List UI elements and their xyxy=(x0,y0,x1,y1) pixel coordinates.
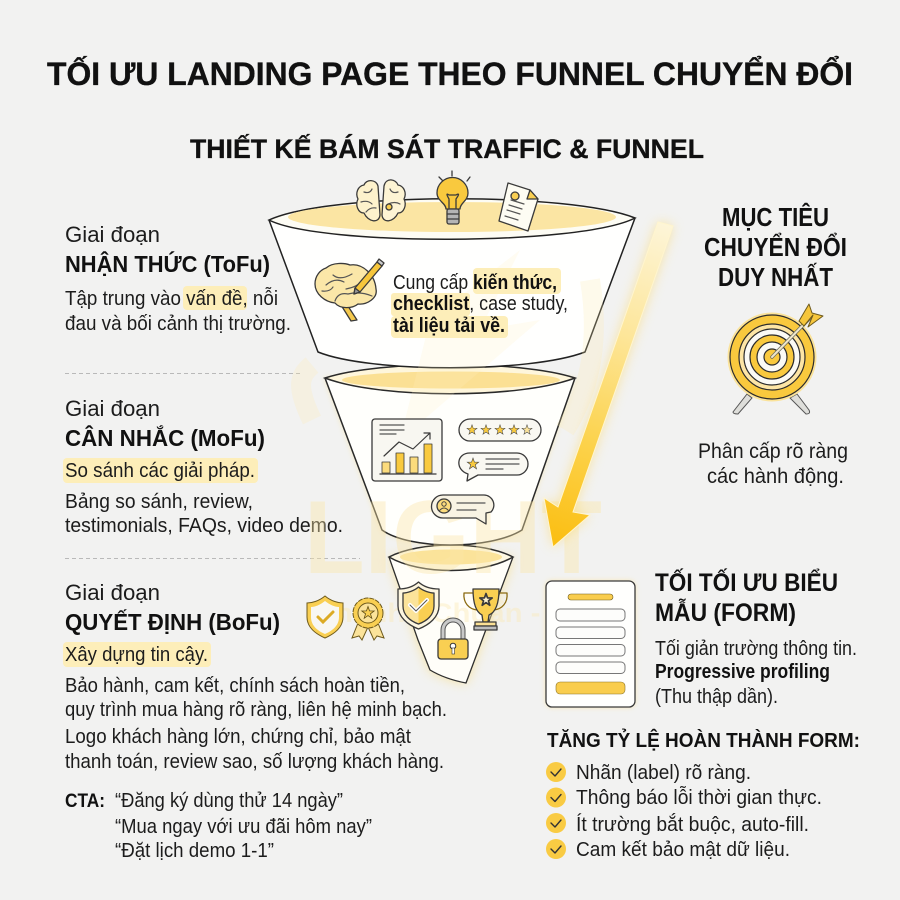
CTA label: CTA: xyxy=(65,790,105,812)
form description: Progressive profiling xyxy=(655,661,830,683)
stage 1 heading: NHẬN THỨC (ToFu) xyxy=(65,250,270,277)
goal heading: DUY NHẤT xyxy=(718,263,833,292)
stage 1 label: Giai đoạn xyxy=(65,222,160,247)
stage 3 key message: Xây dựng tin cậy. xyxy=(65,643,208,666)
panel: stage 2 MoFu text xyxy=(63,396,343,537)
panel: stage 3 BoFu text xyxy=(63,580,447,862)
CTA examples: “Đặt lịch demo 1-1” xyxy=(115,840,274,862)
funnel tier 3: BoFu xyxy=(389,545,513,683)
icon: brain with pencil xyxy=(315,259,384,321)
stage 1 description: Tập trung vào vấn đề, nỗi xyxy=(65,287,278,310)
checklist items: Ít trường bắt buộc, auto-fill. xyxy=(576,813,809,836)
chart card xyxy=(372,419,442,481)
icon: side shield xyxy=(307,596,343,638)
icon: document on funnel rim xyxy=(499,183,538,231)
testimonial speech bubble xyxy=(432,495,494,524)
panel: form optimisation xyxy=(546,567,857,708)
icon: padlock xyxy=(438,620,468,659)
stage 1 description: đau và bối cảnh thị trường. xyxy=(65,312,291,335)
rating pill with stars xyxy=(459,419,541,441)
check icons xyxy=(546,762,566,859)
stage 2 label: Giai đoạn xyxy=(65,396,160,421)
panel: conversion goal xyxy=(698,202,848,488)
stage 3 description: Logo khách hàng lớn, chứng chỉ, bảo mật xyxy=(65,725,411,748)
checklist heading: TĂNG TỶ LỆ HOÀN THÀNH FORM: xyxy=(547,728,860,752)
arrow: funnel flow xyxy=(544,222,673,547)
stage 2 heading: CÂN NHẮC (MoFu) xyxy=(65,424,265,451)
CTA examples: “Đăng ký dùng thử 14 ngày” xyxy=(115,790,343,812)
checklist items: Thông báo lỗi thời gian thực. xyxy=(576,786,822,809)
goal heading: MỤC TIÊU xyxy=(722,202,829,232)
goal caption: các hành động. xyxy=(707,465,844,488)
stage 3 description: thanh toán, review sao, số lượng khách hàng. xyxy=(65,750,444,773)
form heading: TỐI TỐI ƯU BIỂU xyxy=(655,567,838,597)
stage 1 highlight xyxy=(183,286,247,310)
stage 3 heading: QUYẾT ĐỊNH (BoFu) xyxy=(65,608,280,635)
icon: form card xyxy=(546,581,635,707)
form description: (Thu thập dần). xyxy=(655,686,778,708)
stage 2 description: Bảng so sánh, review, xyxy=(65,490,253,513)
goal heading: CHUYỂN ĐỔI xyxy=(704,232,847,262)
logo watermark: Nhanh - Chuẩn - Đẹp xyxy=(314,598,604,628)
highlights xyxy=(391,268,561,338)
icon: brain on funnel rim xyxy=(357,180,405,221)
icon: rosette badge xyxy=(352,598,384,640)
icon: light bulb on funnel rim xyxy=(437,171,470,224)
funnel copy: Cung cấp kiến thức, xyxy=(393,272,569,294)
panel: stage 1 ToFu text xyxy=(65,222,291,335)
form description: Tối giản trường thông tin. xyxy=(655,638,857,660)
checklist items: Cam kết bảo mật dữ liệu. xyxy=(576,838,790,861)
stage 2 key message: So sánh các giải pháp. xyxy=(65,459,255,482)
CTA examples: “Mua ngay với ưu đãi hôm nay” xyxy=(115,816,372,838)
form heading: MẪU (FORM) xyxy=(655,597,796,627)
stage 2 description: testimonials, FAQs, video demo. xyxy=(65,514,343,537)
logo watermark xyxy=(301,250,604,628)
stage 3 highlight xyxy=(63,642,211,667)
funnel copy: tài liệu tải về. xyxy=(393,315,505,337)
stage 3 description: Bảo hành, cam kết, chính sách hoàn tiền, xyxy=(65,674,405,697)
stage 3 label: Giai đoạn xyxy=(65,580,160,605)
stage 1 funnel text xyxy=(391,268,568,338)
stage 2 highlight xyxy=(63,458,258,483)
title: TỐI ƯU LANDING PAGE THEO FUNNEL CHUYỂN ĐỔI xyxy=(47,56,853,92)
funnel tier 2: MoFu xyxy=(325,364,575,545)
funnel tier 1: ToFu xyxy=(269,199,635,368)
icon: funnel shield xyxy=(398,582,439,629)
icon: target with arrow xyxy=(728,304,823,414)
panel: form completion checklist xyxy=(546,728,860,861)
checklist items: Nhãn (label) rõ ràng. xyxy=(576,761,751,784)
goal caption: Phân cấp rõ ràng xyxy=(698,440,848,463)
funnel copy: checklist, case study, xyxy=(393,293,580,315)
subtitle: THIẾT KẾ BÁM SÁT TRAFFIC & FUNNEL xyxy=(190,133,704,164)
review speech bubble xyxy=(459,453,528,481)
icon: trophy xyxy=(464,589,507,630)
logo watermark: LIGHT xyxy=(304,480,602,596)
stage 3 description: quy trình mua hàng rõ ràng, liên hệ minh bạch. xyxy=(65,698,447,721)
